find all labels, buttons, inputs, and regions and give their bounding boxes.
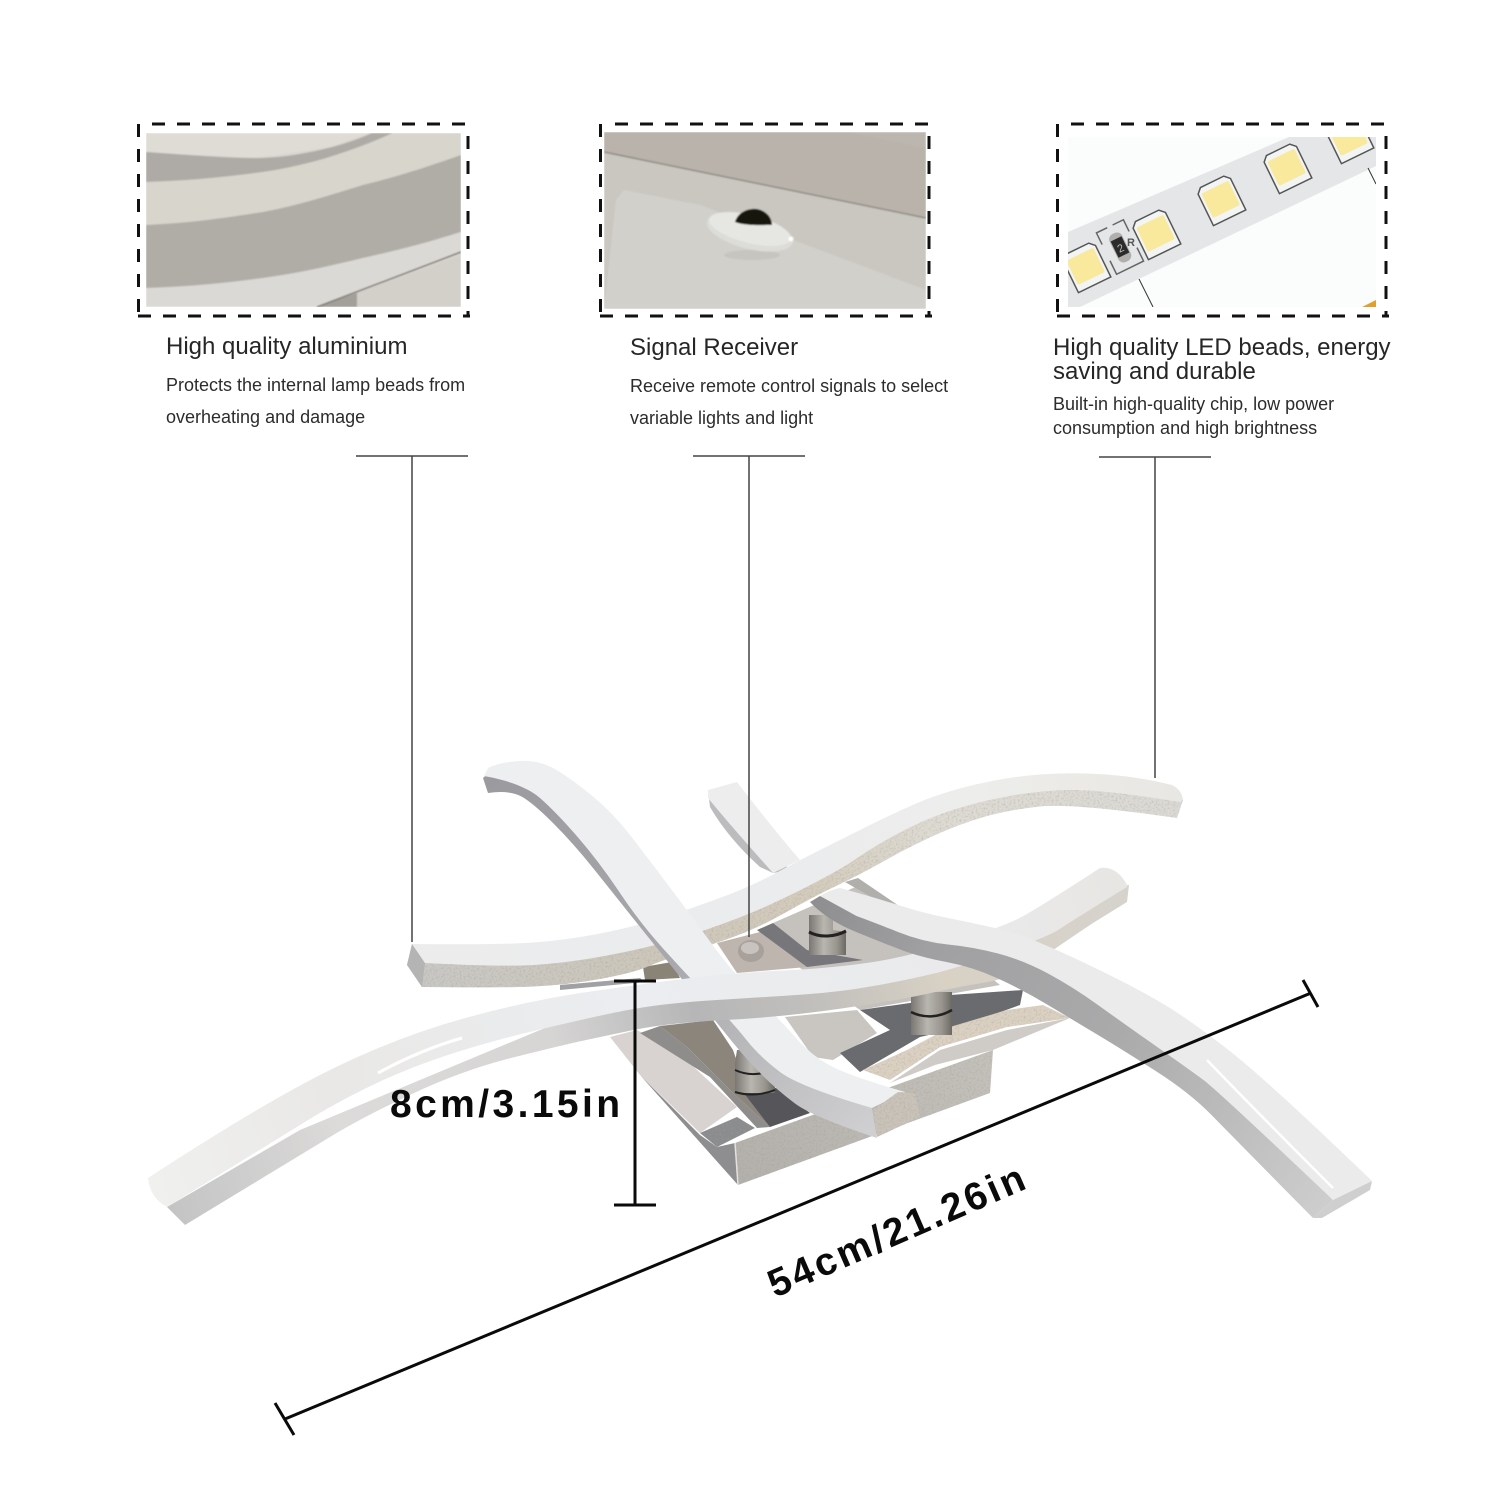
dashed frame — [600, 124, 932, 316]
text block: aluminium: overheating and damage — [166, 407, 365, 427]
sensor on centre plate — [738, 940, 764, 962]
height dimension label: 8cm/3.15in — [390, 1083, 623, 1126]
panel: aluminium detail photo — [138, 124, 470, 316]
photo: LED strip close-up — [1068, 137, 1376, 307]
resistor — [1096, 220, 1144, 274]
resistor: 2 — [1115, 242, 1126, 256]
support posts — [735, 915, 952, 1094]
text block: LED beads: consumption and high brightness — [1053, 418, 1317, 438]
text block: LED beads: saving and durable — [1053, 358, 1256, 385]
arm: back tip (right-going) — [708, 782, 800, 873]
photo: LED strip close-up: R — [1127, 237, 1135, 249]
mounting plate — [560, 878, 1000, 1147]
text block: aluminium: Protects the internal lamp beads from — [166, 375, 465, 395]
arm: long left-low to right-up — [148, 868, 1129, 1225]
text block: LED beads: Built-in high-quality chip, low power — [1053, 394, 1334, 414]
photo: remote receiver close-up — [604, 132, 926, 309]
leader line: signal receiver — [693, 456, 805, 937]
leader line: LED beads — [1099, 457, 1211, 778]
panel: signal receiver detail photo — [600, 124, 932, 316]
text block: signal receiver: Signal Receiver — [630, 334, 798, 361]
text block: LED beads: High quality LED beads, energy — [1053, 334, 1391, 361]
photo: aluminium profile close-up — [146, 133, 461, 307]
mounting box — [640, 1050, 993, 1185]
leader line: aluminium — [356, 456, 468, 942]
height dimension marker — [614, 981, 656, 1205]
width dimension marker — [275, 980, 1318, 1435]
text block: signal receiver — [630, 334, 948, 428]
arm: sweeping right-falling — [810, 888, 1372, 1218]
text block: aluminium — [166, 333, 465, 427]
panel: LED beads detail photo — [1057, 112, 1389, 316]
dashed frame — [138, 124, 470, 316]
arm: top-left to front — [483, 761, 920, 1138]
ceiling lamp illustration — [148, 761, 1372, 1225]
text block: signal receiver: Receive remote control signals to select — [630, 376, 948, 396]
dashed frame — [1057, 124, 1389, 316]
text block: LED beads — [1053, 334, 1391, 438]
arm: long right-rising — [407, 773, 1183, 987]
text block: aluminium: High quality aluminium — [166, 333, 407, 360]
text block: signal receiver: variable lights and light — [630, 408, 813, 428]
width dimension label: 54cm/21.26in — [761, 1156, 1034, 1306]
LED beads — [1068, 137, 1375, 294]
arc bracket — [840, 990, 1070, 1083]
